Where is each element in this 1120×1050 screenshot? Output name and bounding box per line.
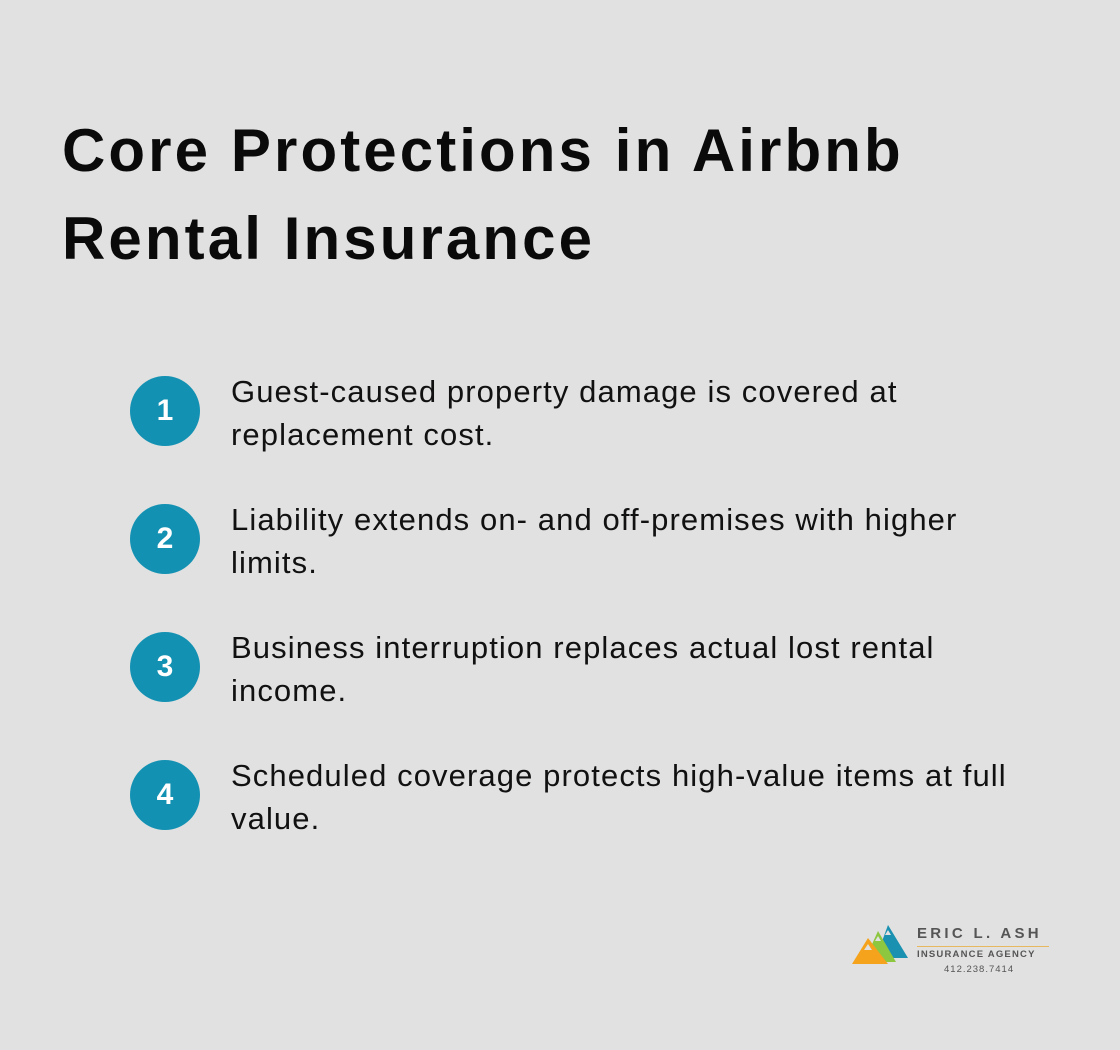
item 3: Business interruption replaces actual lost rental <box>231 630 935 665</box>
item 2: Liability extends on- and off-premises with higher <box>231 502 957 537</box>
logo text: ERIC L. ASH <box>917 925 1042 942</box>
item 3 <box>130 630 935 708</box>
item 1: 1 <box>157 394 173 427</box>
title <box>62 117 904 272</box>
icon: triangles <box>852 925 908 964</box>
item 4: 4 <box>157 778 173 811</box>
item 2: 2 <box>157 522 173 555</box>
item 1: Guest-caused property damage is covered at <box>231 374 898 409</box>
item 2: limits. <box>231 545 318 580</box>
item 1: replacement cost. <box>231 417 494 452</box>
logo <box>852 925 1049 975</box>
item 3: income. <box>231 673 347 708</box>
item 1 <box>130 374 898 452</box>
title: Rental Insurance <box>62 205 595 272</box>
item 2 <box>130 502 957 580</box>
item 3: 3 <box>157 650 173 683</box>
item 4 <box>130 758 1007 836</box>
item 4: Scheduled coverage protects high-value items at full <box>231 758 1007 793</box>
item 4: value. <box>231 801 320 836</box>
logo: INSURANCE AGENCY <box>917 949 1036 960</box>
logo: 412.238.7414 <box>944 964 1014 975</box>
title: Core Protections in Airbnb <box>62 117 904 184</box>
